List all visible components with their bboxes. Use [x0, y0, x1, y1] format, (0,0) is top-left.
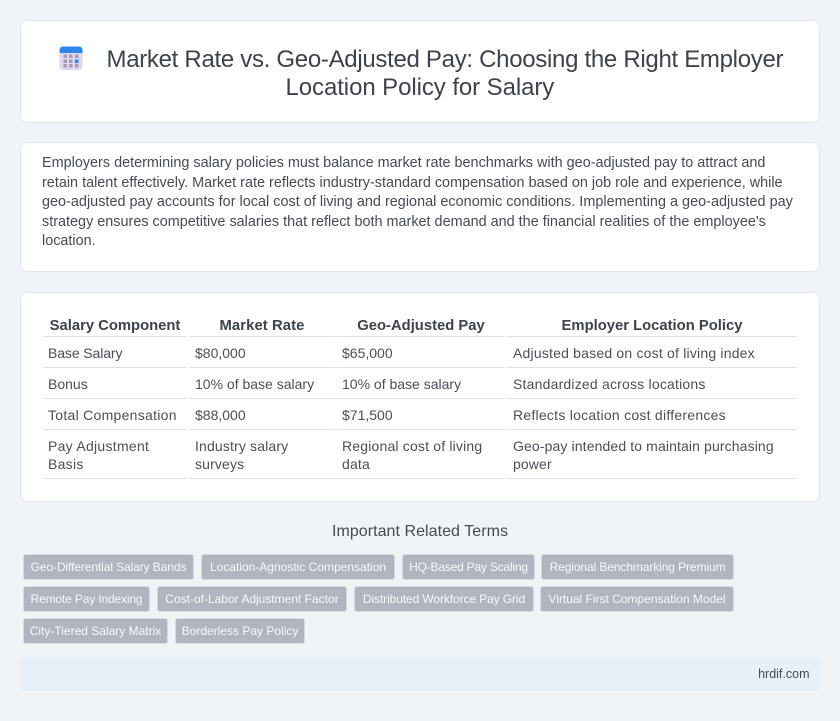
table: Salary Component: [50, 318, 180, 334]
related terms tags: Regional Benchmarking Premium: [550, 560, 725, 574]
table: Geo-Adjusted Pay: [357, 318, 485, 334]
title: Location Policy for Salary: [286, 74, 554, 101]
table: $65,000: [342, 345, 393, 361]
related terms tags: Borderless Pay Policy: [182, 624, 298, 638]
title: [106, 46, 784, 101]
table: $80,000: [195, 345, 246, 361]
text block: intro paragraph: retain talent effectively. Market rate reflects industry-standard compensation based on job role and experience, while: [42, 175, 783, 191]
text block: intro paragraph: Employers determining salary policies must balance market rate benchmarks with geo-adjusted pay to attract and: [42, 155, 765, 171]
related terms tags: HQ-Based Pay Scaling: [409, 560, 528, 574]
table: Adjusted based on cost of living index: [513, 345, 755, 361]
text block: intro paragraph: strategy ensures competitive salaries that reflect both market demand and the financial realities of the employee's: [42, 214, 766, 230]
related terms tags: [23, 554, 734, 644]
table: Total Compensation: [48, 407, 177, 423]
text block: intro paragraph: [42, 155, 793, 249]
panel: comparison table: [20, 292, 820, 502]
related terms tags: Cost-of-Labor Adjustment Factor: [165, 592, 339, 606]
related terms tags: Distributed Workforce Pay Grid: [363, 592, 525, 606]
table: Pay Adjustment: [48, 438, 149, 454]
text block: intro paragraph: geo-adjusted pay accounts for local cost of living and regional economic conditions. Implementing a geo-adjusted pay: [42, 194, 793, 210]
table: Employer Location Policy: [562, 318, 742, 334]
table: Regional cost of living: [342, 438, 482, 454]
table: Standardized across locations: [513, 376, 706, 392]
table: [43, 318, 797, 479]
panel: header: [20, 20, 820, 123]
related terms tags: City-Tiered Salary Matrix: [30, 624, 161, 638]
text block: intro paragraph: location.: [42, 233, 96, 249]
table: data: [342, 456, 370, 472]
table: Basis: [48, 456, 84, 472]
table: $71,500: [342, 407, 393, 423]
table: Bonus: [48, 376, 88, 392]
table: Industry salary: [195, 438, 288, 454]
related terms tags: Remote Pay Indexing: [31, 592, 142, 606]
related terms tags: Geo-Differential Salary Bands: [31, 560, 186, 574]
table: 10% of base salary: [195, 376, 314, 392]
table: 10% of base salary: [342, 376, 461, 392]
table: surveys: [195, 456, 244, 472]
table: Base Salary: [48, 345, 122, 361]
table: Market Rate: [220, 318, 304, 334]
table: power: [513, 456, 552, 472]
table: $88,000: [195, 407, 246, 423]
panel: introduction: [20, 142, 820, 272]
related terms tags: Virtual First Compensation Model: [548, 592, 726, 606]
table: Reflects location cost differences: [513, 407, 726, 423]
icon: calendar: [60, 46, 82, 70]
footer: [20, 657, 820, 691]
title: Market Rate vs. Geo-Adjusted Pay: Choosing the Right Employer: [106, 46, 783, 73]
related terms tags: Location-Agnostic Compensation: [210, 560, 386, 574]
table: Geo-pay intended to maintain purchasing: [513, 438, 774, 454]
footer: site name: hrdif.com: [758, 667, 810, 681]
heading: related terms: Important Related Terms: [332, 523, 508, 540]
